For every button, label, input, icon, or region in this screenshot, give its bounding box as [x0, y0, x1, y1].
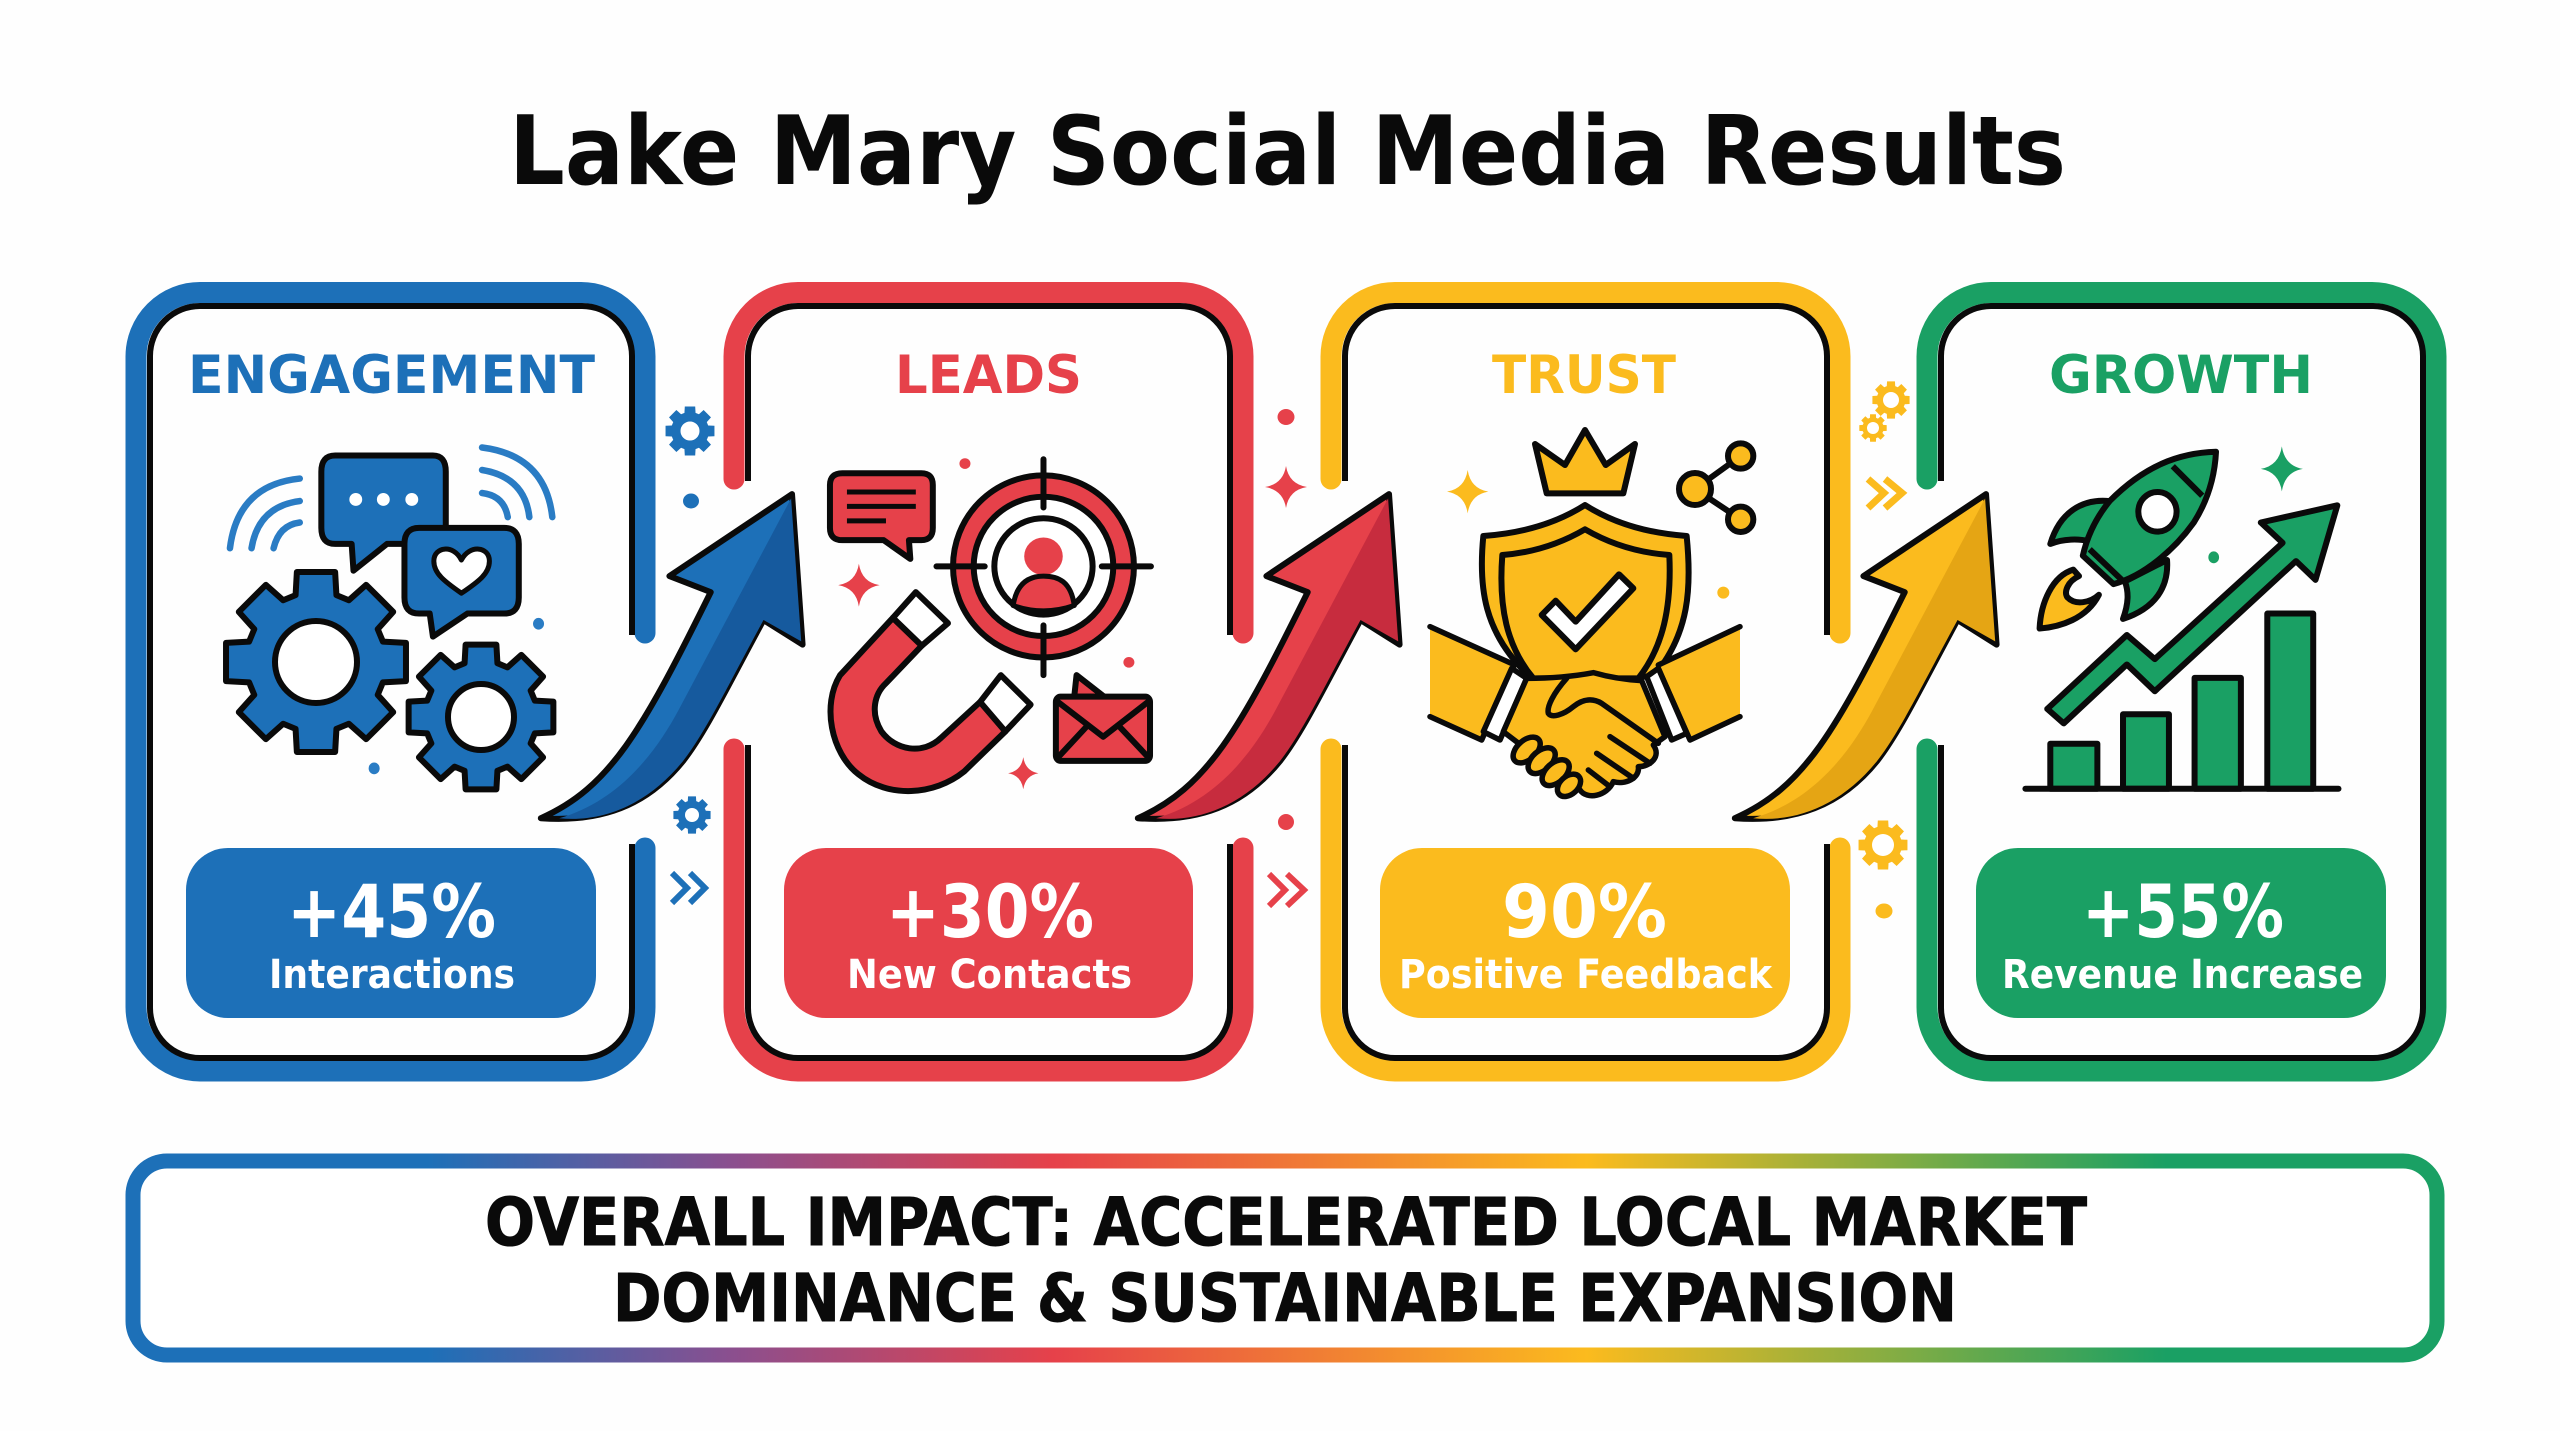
title: Lake Mary Social Media Results [509, 97, 2066, 207]
heading: TRUST [1492, 345, 1676, 406]
decorations: gap between leads and trust [1265, 409, 1307, 906]
icon: target [936, 459, 1151, 675]
stat pill: +30% [886, 870, 1094, 955]
card border [136, 292, 645, 1071]
panel: trust [1331, 292, 1840, 1071]
stat pill: Revenue Increase [2002, 952, 2363, 998]
icon: envelope [1056, 675, 1150, 761]
arrow: engagement to leads [541, 494, 803, 819]
stat pill: New Contacts [847, 952, 1132, 998]
icon: magnet [830, 592, 1031, 791]
stat pill: +45% [287, 870, 496, 955]
arrow: trust to growth [1735, 494, 1997, 819]
callout text: OVERALL IMPACT: ACCELERATED LOCAL MARKET [485, 1184, 2087, 1261]
card border [1331, 292, 1840, 1071]
icon: trend arrow [2047, 505, 2337, 723]
stat pill [1976, 848, 2386, 1018]
icon: shield [1482, 505, 1689, 678]
icon: magnet, target, message and envelope [830, 458, 1151, 791]
stat pill: Positive Feedback [1399, 952, 1773, 998]
panel: leads [734, 292, 1243, 1071]
icon: shield, crown and handshake [1430, 430, 1753, 801]
callout text: DOMINANCE & SUSTAINABLE EXPANSION [613, 1260, 1957, 1337]
panel: overall impact [133, 1161, 2437, 1355]
callout text [485, 1184, 2087, 1337]
decorations: gap between trust and growth [1859, 381, 1910, 919]
icon: gears [226, 572, 553, 789]
stat pill: 90% [1502, 870, 1667, 955]
card border [1927, 292, 2436, 1071]
icon: bubbles and waves [230, 447, 552, 774]
heading: GROWTH [2049, 345, 2313, 406]
icon: handshake [1430, 627, 1740, 801]
bar chart [2025, 614, 2338, 789]
arrow: leads to trust [1138, 494, 1400, 819]
icon: crown [1535, 430, 1635, 493]
icon: rocket [2040, 452, 2216, 629]
heading: ENGAGEMENT [188, 345, 595, 406]
heading: LEADS [895, 345, 1082, 406]
decorations: gap between engagement and leads [666, 407, 714, 903]
stat pill [1380, 848, 1790, 1018]
stat pill [784, 848, 1193, 1018]
icon: chat bubbles, signal waves and gears [226, 447, 553, 789]
panel: growth [1927, 292, 2436, 1071]
icon: message bubble [830, 473, 933, 559]
panel: engagement [136, 292, 645, 1071]
icon: rocket and rising bar chart [2025, 446, 2338, 789]
icon: share nodes [1679, 443, 1753, 532]
stat pill [186, 848, 596, 1018]
card border [734, 292, 1243, 1071]
stat pill: +55% [2082, 870, 2284, 955]
stat pill: Interactions [269, 952, 515, 998]
